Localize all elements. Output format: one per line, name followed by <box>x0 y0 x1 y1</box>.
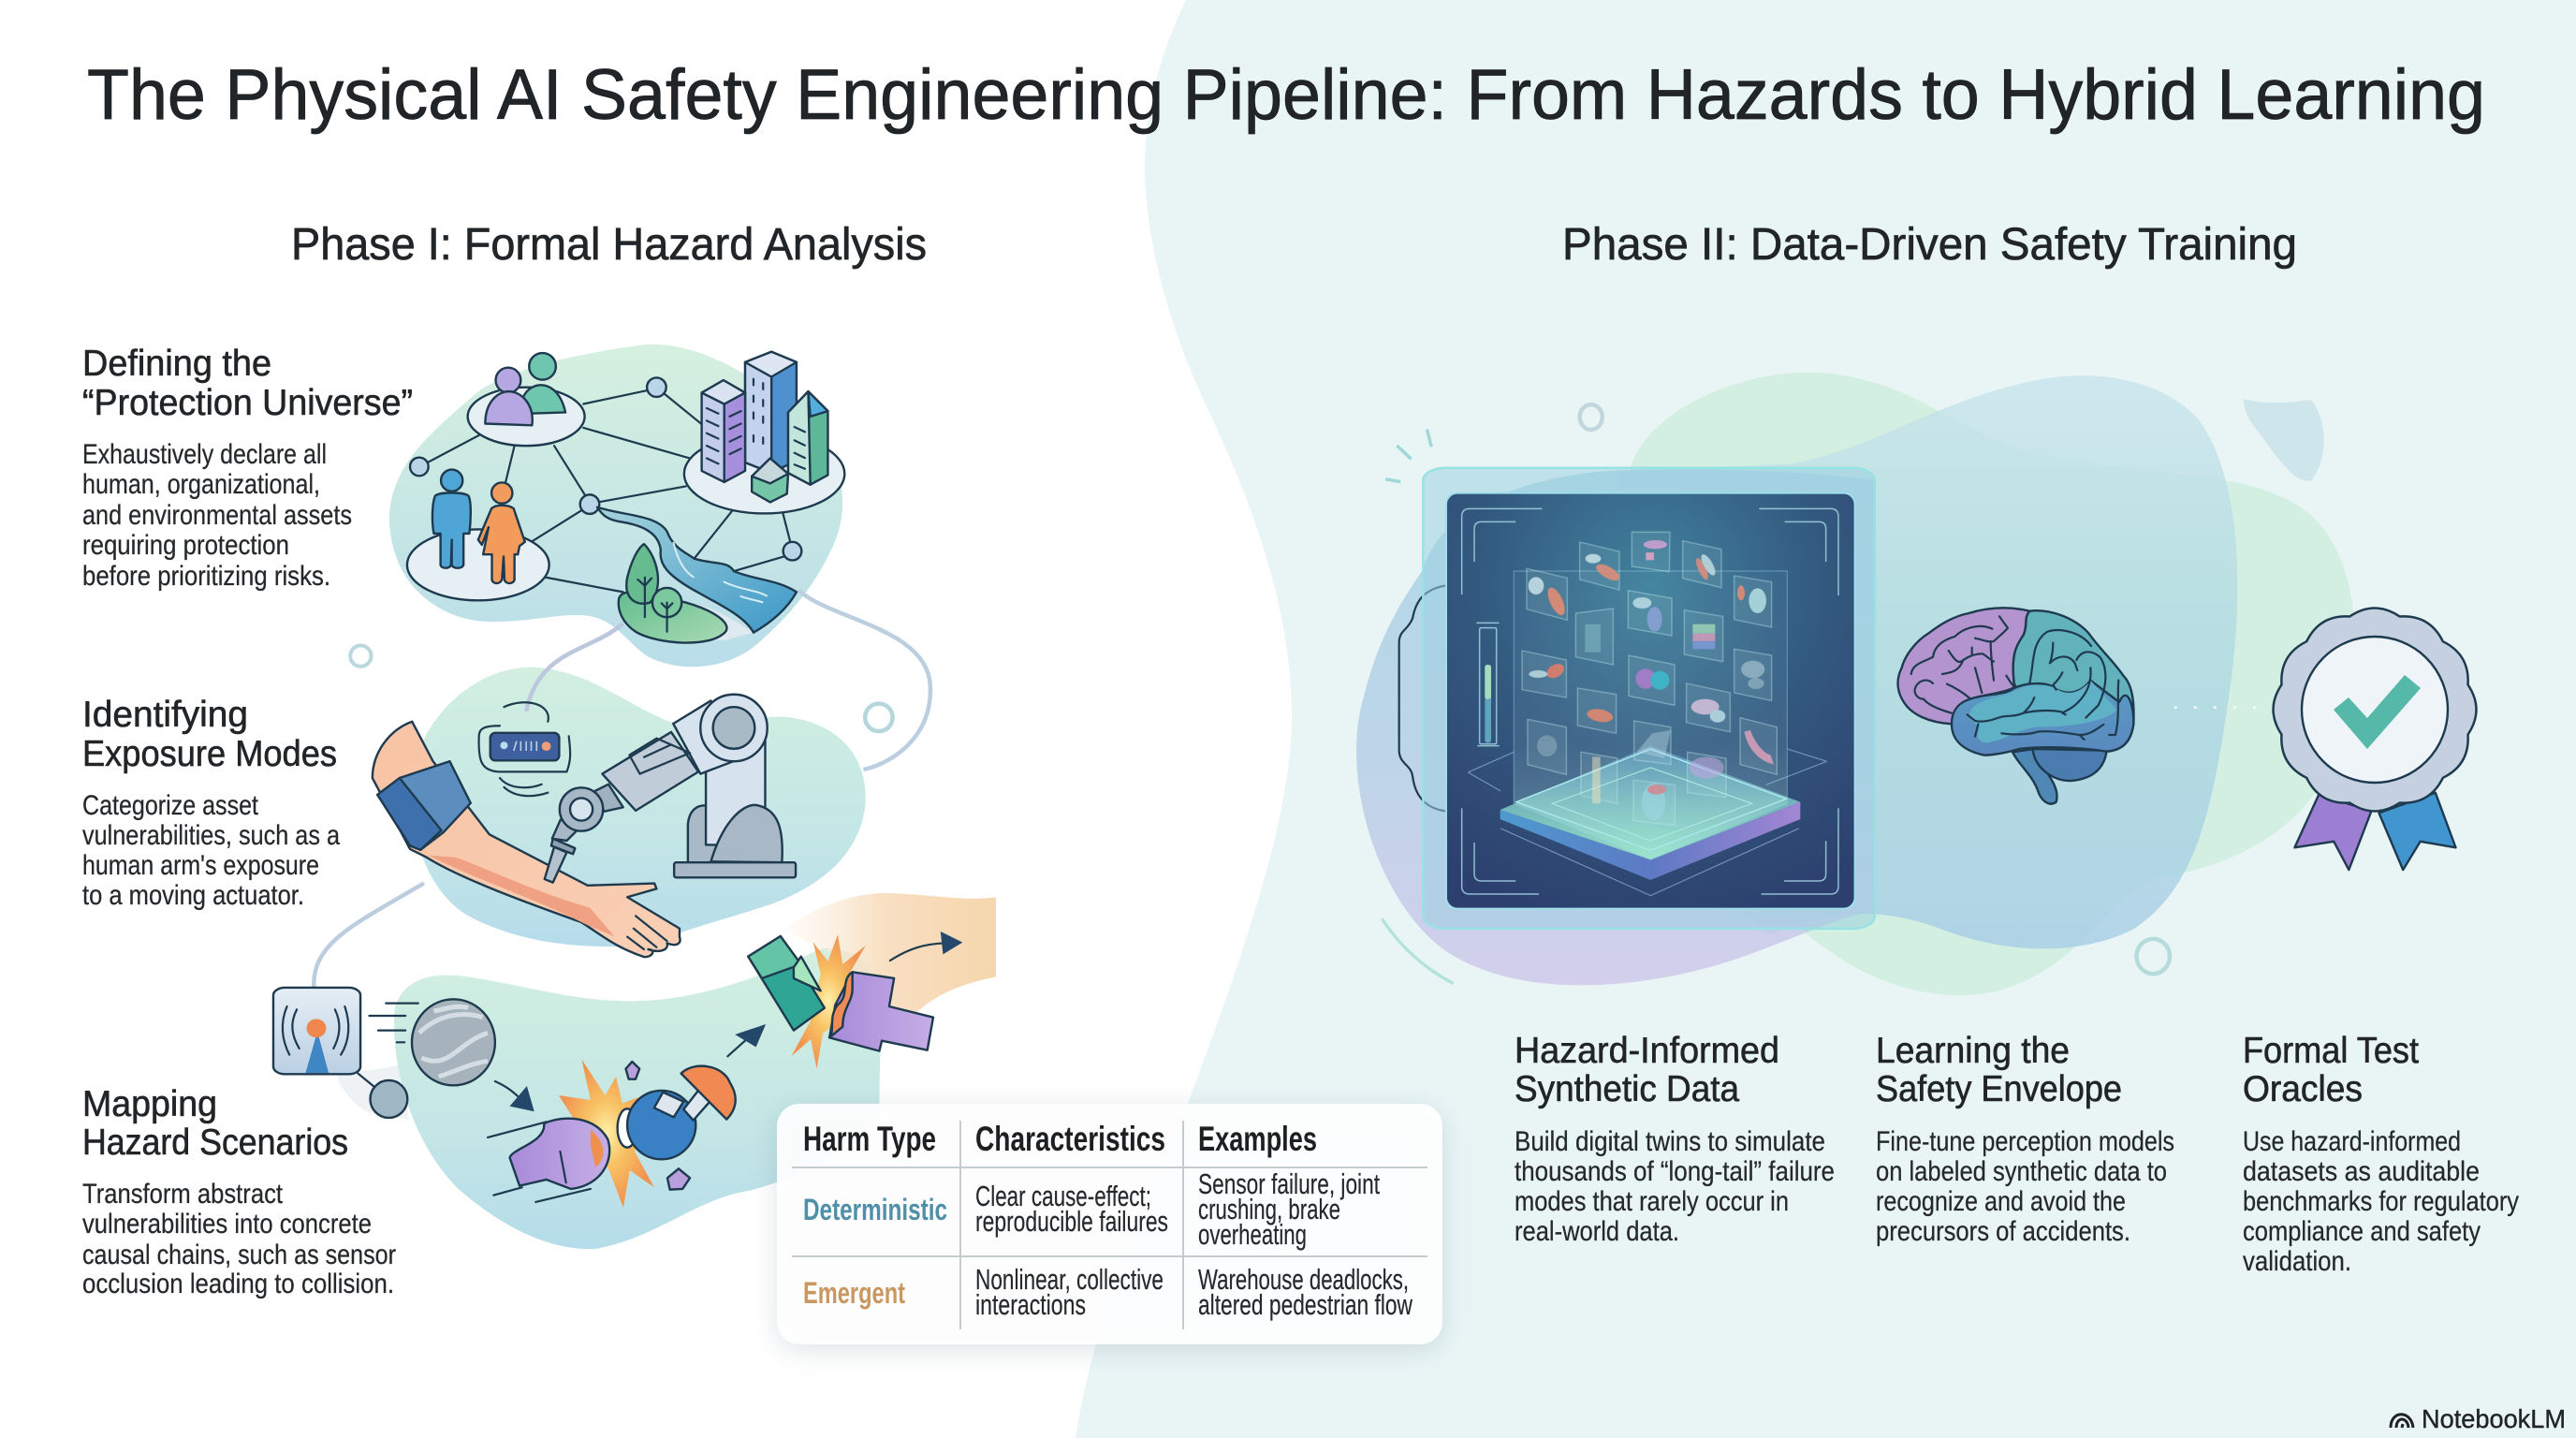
body: to a moving actuator. <box>82 880 304 911</box>
body: real-world data. <box>1515 1216 1679 1247</box>
icon: purple person <box>485 368 533 425</box>
land platform under river <box>681 603 754 640</box>
icon: orange woman <box>478 482 525 583</box>
row: emergent: Emergent <box>803 1276 905 1310</box>
seal inner disc <box>2302 637 2448 783</box>
arrow: impact outward <box>890 932 962 961</box>
icon: speed lines <box>369 1004 418 1042</box>
line: tower to small ball <box>358 1074 375 1088</box>
body: Transform abstract <box>82 1179 284 1210</box>
text: formal test oracles <box>2243 1031 2519 1277</box>
body: causal chains, such as sensor <box>82 1240 396 1270</box>
heading: Defining the <box>82 344 271 384</box>
row: emergent <box>803 1263 1412 1321</box>
body <box>1876 1126 2174 1247</box>
icon: occluding small ball <box>371 1080 407 1118</box>
hologram volume <box>1514 571 1787 859</box>
heading: Exposure Modes <box>82 734 337 774</box>
scalloped seal <box>2274 609 2476 811</box>
platform: individuals <box>407 529 549 600</box>
blob: peach trailing shape <box>783 893 996 1018</box>
body: and environmental assets <box>82 500 352 531</box>
body: Build digital twins to simulate <box>1515 1126 1825 1157</box>
body: modes that rarely occur in <box>1515 1186 1789 1217</box>
heading: Phase I: Phase I: Formal Hazard Analysis <box>291 220 927 270</box>
platform <box>1500 746 1800 880</box>
body: Use hazard-informed <box>2243 1126 2461 1157</box>
body <box>82 790 340 911</box>
text: learning the safety envelope <box>1876 1031 2174 1247</box>
decorative sparks <box>1385 430 1431 481</box>
icon: blue man <box>432 470 471 568</box>
right hemisphere <box>2013 610 2134 752</box>
row: emergent: Warehouse deadlocks, <box>1198 1263 1409 1296</box>
heading: Hazard Scenarios <box>82 1123 348 1163</box>
illustration: hazard scenario chain <box>273 883 996 1249</box>
body: datasets as auditable <box>2243 1156 2480 1187</box>
blob: hazard scenario background <box>394 948 882 1249</box>
body: recognize and avoid the <box>1876 1186 2126 1217</box>
heading: Mapping <box>82 1084 217 1124</box>
arrow: collision to impact <box>727 1024 766 1056</box>
body: human, organizational, <box>82 469 320 500</box>
blob: exposure modes background <box>411 668 866 946</box>
table header: Harm Type <box>803 1120 936 1158</box>
brain folds <box>1911 616 2118 740</box>
corner brackets <box>1462 508 1838 894</box>
icon: certification badge <box>2274 609 2476 870</box>
text: defining the protection universe <box>82 344 413 592</box>
icon: purple block <box>829 972 933 1051</box>
network nodes <box>410 377 801 560</box>
watermark: NotebookLM <box>2391 1404 2566 1433</box>
table header: Examples <box>1198 1120 1317 1158</box>
heading <box>82 344 413 423</box>
heading <box>2243 1031 2419 1109</box>
row: emergent: interactions <box>975 1288 1086 1321</box>
heading <box>1876 1031 2122 1109</box>
decorative swoosh <box>1382 918 1454 984</box>
body: benchmarks for regulatory <box>2243 1186 2519 1217</box>
decorative ring <box>865 704 893 731</box>
blob: lilac left <box>1356 469 1875 985</box>
body: precursors of accidents. <box>1876 1216 2130 1247</box>
icon: sensor tower <box>273 988 360 1074</box>
pale shape behind sensor <box>336 1064 409 1121</box>
heading: “Protection Universe” <box>82 383 413 423</box>
body: vulnerabilities, such as a <box>82 820 340 851</box>
text: hazard-informed synthetic data <box>1515 1031 1835 1247</box>
heading <box>82 1084 348 1163</box>
ribbon tails <box>2294 793 2455 870</box>
icon: blue object with mushroom-like shield <box>618 1066 736 1159</box>
row: emergent: altered pedestrian flow <box>1198 1288 1412 1321</box>
body: on labeled synthetic data to <box>1876 1156 2167 1187</box>
tablet side handle <box>1399 586 1445 811</box>
heading: Synthetic Data <box>1515 1069 1739 1109</box>
icon: collision burst <box>559 1060 654 1208</box>
body: vulnerabilities into concrete <box>82 1209 372 1240</box>
blob: protection universe background <box>389 345 842 667</box>
decorative ring <box>2137 939 2170 974</box>
icon: green person <box>523 353 565 414</box>
heading: Safety Envelope <box>1876 1069 2122 1109</box>
heading: Formal Test <box>2243 1031 2419 1071</box>
row: deterministic <box>803 1167 1380 1251</box>
heading <box>1515 1031 1779 1109</box>
body: thousands of “long-tail” failure <box>1515 1156 1835 1187</box>
icon: brain <box>1898 608 2134 804</box>
decorative drop <box>2244 399 2324 481</box>
row: deterministic: overheating <box>1198 1218 1307 1251</box>
decorative ring <box>350 646 372 667</box>
heading <box>82 695 337 774</box>
body: requiring protection <box>82 530 289 561</box>
screen panel <box>1446 493 1855 909</box>
icon: robot wrist and tool <box>545 787 603 883</box>
heading: Learning the <box>1876 1031 2070 1071</box>
left hemisphere <box>1898 608 2029 724</box>
body: validation. <box>2243 1246 2351 1277</box>
icon: robot arm <box>592 695 796 877</box>
body: before prioritizing risks. <box>82 561 330 592</box>
icon: city buildings <box>702 352 827 502</box>
heading: Phase II: Phase II: Data-Driven Safety Training <box>1562 220 2297 270</box>
illustration: tablet screen <box>1446 493 1855 909</box>
illustration: phase II blobs and tablet <box>1356 373 2355 995</box>
icon: notebook logo <box>2391 1415 2413 1428</box>
icon: occlusion sphere <box>412 999 495 1085</box>
arrow: sphere to collision <box>495 1081 534 1111</box>
decorative ring <box>1580 404 1603 430</box>
body <box>1515 1126 1835 1247</box>
row: deterministic: Sensor failure, joint <box>1198 1167 1380 1200</box>
heading: Hazard-Informed <box>1515 1031 1779 1071</box>
icon: second burst <box>791 934 866 1069</box>
row: emergent: Nonlinear, collective <box>975 1263 1164 1296</box>
row: deterministic: reproducible failures <box>975 1205 1168 1238</box>
body <box>82 1179 396 1299</box>
table header: Characteristics <box>975 1120 1165 1158</box>
row: deterministic: Deterministic <box>803 1193 947 1226</box>
title: The Physical AI Safety Engineering Pipeline: From Hazards to Hybrid Learning <box>87 55 2485 135</box>
table: harm types <box>777 1104 1442 1344</box>
body: Exhaustively declare all <box>82 439 327 470</box>
hologram cards <box>1522 532 1777 826</box>
platform: people <box>468 388 585 446</box>
temporal lobe <box>1952 681 2133 756</box>
gauge <box>1476 623 1500 746</box>
body: Categorize asset <box>82 790 259 821</box>
row: deterministic: Clear cause-effect; <box>975 1180 1151 1212</box>
table header <box>803 1120 1317 1158</box>
body <box>2243 1126 2519 1277</box>
blob: green <box>1631 373 2355 995</box>
table rules <box>792 1121 1427 1329</box>
tablet frame <box>1423 468 1875 929</box>
heading: Oracles <box>2243 1069 2363 1109</box>
dotted link <box>2174 706 2259 709</box>
connector: to sensor tower <box>314 883 424 988</box>
icon: human arm <box>373 722 681 957</box>
illustration: protection universe and exposure modes <box>350 345 930 957</box>
temporal lobe highlight <box>1969 681 2117 742</box>
table card <box>777 1104 1442 1344</box>
blob: blue <box>1618 375 2237 948</box>
connector: network to device <box>526 624 623 712</box>
heading: Identifying <box>82 695 248 735</box>
connector: network to right loop <box>798 590 930 770</box>
wordmark: NotebookLM <box>2422 1404 2566 1433</box>
icon: pulse device <box>479 702 570 796</box>
text: mapping hazard scenarios <box>82 1084 396 1299</box>
network lines <box>428 390 790 592</box>
row: deterministic: crushing, brake <box>1198 1193 1340 1225</box>
body: human arm's exposure <box>82 850 319 881</box>
body: compliance and safety <box>2243 1216 2481 1247</box>
body: Fine-tune perception models <box>1876 1126 2174 1157</box>
body: occlusion leading to collision. <box>82 1269 394 1299</box>
icon: debris <box>626 1062 690 1190</box>
icon: trees and land <box>619 544 726 643</box>
floor grid lines <box>1468 749 1827 896</box>
text: identifying exposure modes <box>82 695 340 911</box>
icon: green block <box>748 936 825 1031</box>
body <box>82 439 352 592</box>
icon: river <box>597 507 797 633</box>
cerebellum <box>2033 749 2107 781</box>
brain stem <box>2012 749 2057 804</box>
background: phase II tinted region <box>1076 0 2576 1438</box>
icon: purple vehicle <box>488 1119 609 1202</box>
platform: buildings <box>684 434 844 513</box>
check mark <box>2334 675 2421 749</box>
